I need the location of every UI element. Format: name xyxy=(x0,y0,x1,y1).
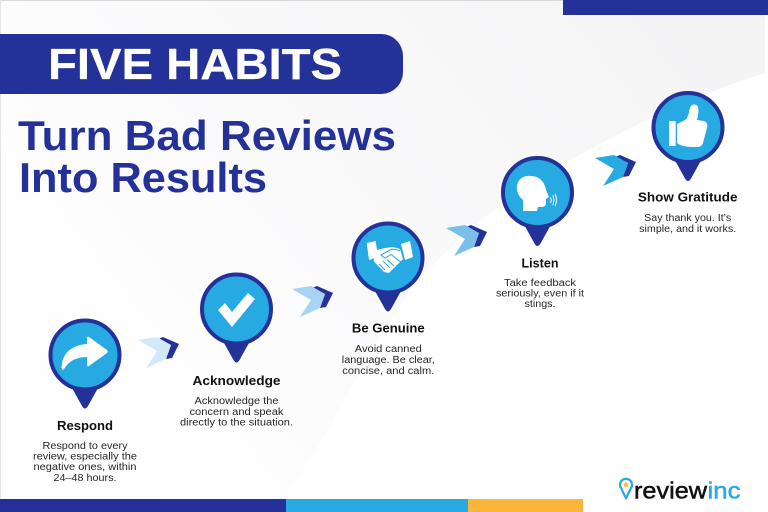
subtitle heading: Into Results xyxy=(19,154,267,201)
logo: reviewinc xyxy=(620,478,740,504)
step text: Avoid canned xyxy=(355,344,422,355)
step text: 24–48 hours. xyxy=(54,473,116,484)
step text: seriously, even if it xyxy=(496,288,584,300)
step text: Take feedback xyxy=(504,278,577,289)
icon: logo pin xyxy=(620,479,632,498)
arrow 2 xyxy=(292,286,333,317)
icon: pin with speaking head xyxy=(503,158,572,246)
step text: directly to the situation. xyxy=(180,418,293,428)
step text: review, especially the xyxy=(33,452,137,462)
step 2: Acknowledge xyxy=(180,274,293,428)
logo: reviewinc: inc xyxy=(708,478,740,504)
subtitle heading: Turn Bad Reviews xyxy=(18,112,396,159)
title banner: FIVE HABITS xyxy=(48,40,342,89)
step text: Listen xyxy=(522,256,559,271)
step 1: Respond xyxy=(33,320,137,484)
step 4: Listen xyxy=(496,158,584,310)
step text: Show Gratitude xyxy=(638,190,737,205)
step 5: Show Gratitude xyxy=(638,93,737,235)
step text: stings. xyxy=(524,299,556,310)
step text xyxy=(496,256,584,310)
icon: pin with handshake xyxy=(354,224,422,312)
step text xyxy=(638,190,737,235)
top right accent bar xyxy=(563,0,768,15)
step text: Acknowledge the xyxy=(194,396,279,407)
step text: concise, and calm. xyxy=(342,366,434,377)
step text: language. Be clear, xyxy=(342,355,435,366)
step text xyxy=(180,373,293,428)
step text: negative ones, within xyxy=(34,462,136,473)
arrow 1 xyxy=(138,337,179,368)
icon: pin with check mark xyxy=(202,274,271,362)
subtitle heading xyxy=(18,112,396,201)
step text: Respond xyxy=(57,418,113,433)
step text xyxy=(342,321,435,377)
step text: concern and speak xyxy=(190,407,285,418)
icon: pin with thumbs up xyxy=(654,93,722,181)
logo: reviewinc: review xyxy=(634,478,707,504)
step text: Say thank you. It’s xyxy=(644,213,731,224)
step text: Respond to every xyxy=(42,441,128,452)
step text: Acknowledge xyxy=(192,373,280,388)
arrow 3 xyxy=(446,225,487,256)
bottom color bar xyxy=(0,499,583,512)
arrow 4 xyxy=(595,155,636,186)
step text: Be Genuine xyxy=(352,321,425,336)
icon: pin with reply arrow xyxy=(50,320,120,408)
step text xyxy=(33,418,137,484)
title banner xyxy=(0,34,403,94)
step 3: Be Genuine xyxy=(342,224,435,377)
step text: simple, and it works. xyxy=(639,224,736,235)
